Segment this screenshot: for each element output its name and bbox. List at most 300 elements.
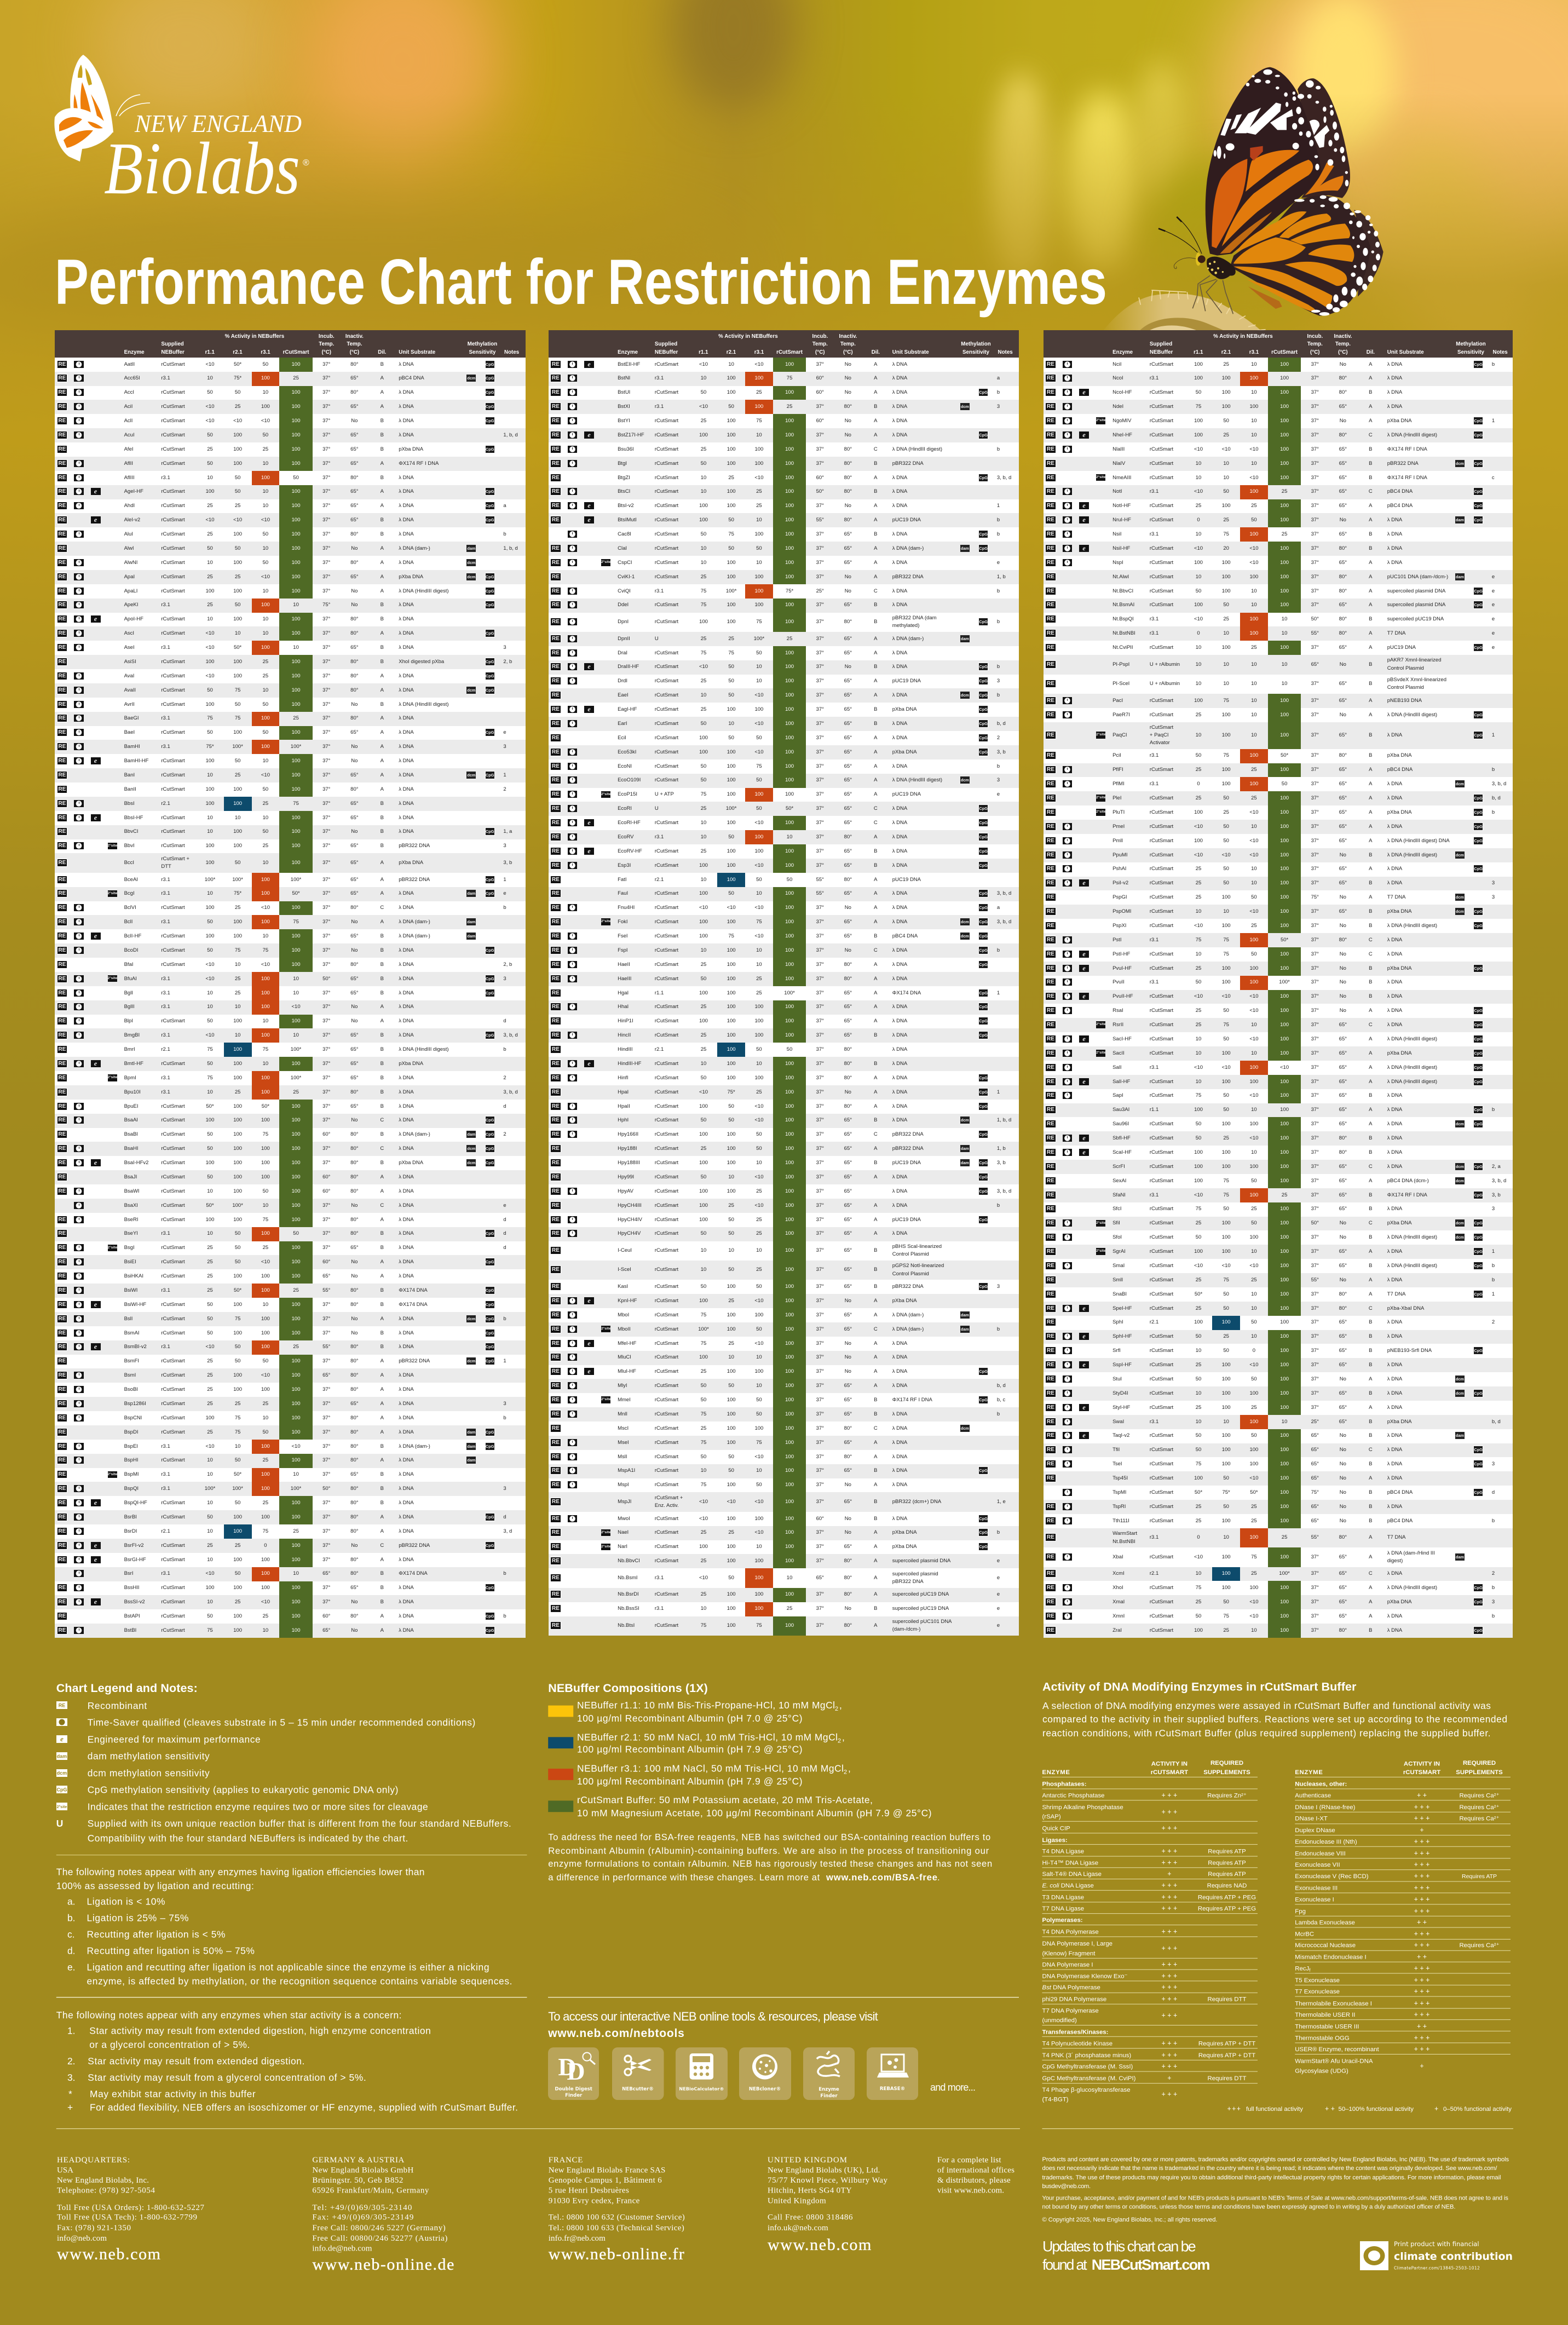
enzyme rows: rCutSmart: [161, 1514, 185, 1520]
enzyme rows: 65°: [844, 1160, 852, 1166]
enzyme rows: 55°: [1311, 1534, 1319, 1540]
enzyme rows: CpG: [1474, 1461, 1483, 1466]
ligation notes: [56, 1867, 512, 1987]
enzyme rows: 100: [785, 1298, 794, 1304]
enzyme rows: No: [1340, 894, 1346, 900]
enzyme rows: 100: [261, 1174, 270, 1180]
enzyme rows: RE: [59, 976, 66, 982]
enzyme rows: rCutSmart: [1150, 1333, 1173, 1339]
enzyme rows: 100: [754, 1516, 763, 1522]
enzyme rows: A: [381, 574, 384, 580]
enzyme rows: 25: [235, 990, 240, 996]
enzyme rows: 80°: [844, 1075, 852, 1081]
enzyme rows: r3.1: [1150, 781, 1158, 787]
enzyme rows: A: [874, 1018, 878, 1024]
enzyme rows: CpG: [486, 674, 494, 678]
enzyme rows: 10: [207, 1188, 213, 1194]
enzyme rows: 10: [756, 560, 762, 566]
enzyme rows: λ DNA: [399, 1528, 414, 1534]
enzyme rows: CpG: [979, 678, 988, 683]
enzyme rows: b: [1492, 1585, 1495, 1591]
enzyme rows: e: [1082, 1078, 1086, 1085]
enzyme rows: rCutSmart: [655, 1326, 678, 1332]
enzyme rows: λ DNA (dam-): [892, 545, 924, 551]
enzyme rows: RE: [1047, 1277, 1054, 1283]
enzyme rows: U: [655, 636, 659, 642]
enzyme rows: B: [1369, 993, 1373, 999]
enzyme rows: 37°: [1311, 404, 1319, 410]
enzyme rows: 100: [233, 616, 242, 622]
enzyme rows: A: [381, 375, 384, 381]
footer: international offices note: & distributors, please: [937, 2176, 1011, 2185]
enzyme rows: 37°: [322, 1230, 330, 1236]
enzyme rows: A: [1369, 630, 1373, 636]
enzyme rows: 100: [233, 1160, 242, 1166]
enzyme rows: A: [381, 588, 384, 594]
enzyme rows: 65°: [1339, 1613, 1347, 1619]
enzyme rows: NmeAIII: [1112, 475, 1131, 481]
enzyme rows: 65°: [350, 446, 359, 452]
star activity notes: May exhibit star activity in this buffer: [90, 2088, 256, 2099]
enzyme rows: MspA1I: [618, 1467, 635, 1474]
enzyme rows: CpG: [1474, 1221, 1483, 1225]
enzyme rows: λ DNA: [892, 1368, 907, 1374]
enzyme rows: 100: [785, 1411, 794, 1417]
enzyme rows: λ DNA: [892, 1482, 907, 1488]
enzyme rows: B: [874, 848, 878, 854]
enzyme rows: 37°: [816, 834, 824, 840]
enzyme rows: MnlI: [618, 1411, 627, 1417]
enzyme rows: 100: [785, 721, 794, 727]
left activity table: + + +: [1161, 2051, 1177, 2059]
enzyme rows: 100: [1280, 838, 1289, 844]
enzyme rows: dam: [467, 1132, 476, 1137]
enzyme rows: No: [351, 758, 358, 764]
right activity table: + + +: [1414, 1895, 1429, 1903]
enzyme rows: BsrDI: [124, 1528, 137, 1534]
enzyme rows: 75: [701, 1482, 706, 1488]
enzyme rows: rCutSmart: [161, 729, 185, 735]
enzyme rows: λ DNA: [399, 962, 414, 968]
footer: United Kingdom address: Call Free: 0800 318486: [768, 2213, 853, 2222]
enzyme rows: rCutSmart: [161, 962, 185, 968]
enzyme rows: A: [874, 503, 878, 509]
enzyme rows: r3.1: [1150, 630, 1158, 636]
enzyme rows: 37°: [1311, 560, 1319, 566]
enzyme rows: 100: [233, 1585, 242, 1591]
enzyme rows: RE: [59, 1245, 66, 1251]
enzyme rows: 100: [785, 1529, 794, 1535]
enzyme rows: rCutSmart: [655, 1247, 678, 1253]
chart updates callout: found at: [1042, 2257, 1087, 2273]
enzyme rows: 37°: [1311, 1554, 1319, 1560]
enzyme rows: 50: [235, 1457, 240, 1463]
enzyme rows: 100: [206, 843, 214, 849]
enzyme rows: 10: [701, 560, 706, 566]
enzyme rows: C: [1369, 488, 1373, 494]
enzyme rows: B: [1369, 852, 1373, 858]
enzyme rows: rCutSmart: [1150, 1362, 1173, 1368]
left activity table: Hi-T4™ DNA Ligase: [1042, 1860, 1098, 1866]
enzyme rows: 80°: [350, 905, 359, 911]
enzyme rows: CpG: [1474, 866, 1483, 871]
enzyme rows: rCutSmart: [161, 545, 185, 551]
enzyme rows: 100: [206, 905, 214, 911]
enzyme rows: 65°: [1339, 1570, 1347, 1576]
buffer r2.1: [548, 1731, 845, 1755]
enzyme rows: e: [94, 1499, 97, 1506]
enzyme rows: 100: [261, 990, 270, 996]
enzyme rows: b: [997, 692, 1000, 698]
enzyme rows: λ DNA: [399, 1316, 414, 1322]
enzyme rows: C: [1369, 951, 1373, 957]
enzyme rows: BspHI: [124, 1457, 138, 1463]
enzyme rows: RE: [1047, 894, 1054, 900]
enzyme rows: 75: [756, 619, 762, 625]
footer: headquarters USA address: Fax: (978) 921-1350: [57, 2224, 131, 2232]
enzyme rows: <10: [754, 905, 763, 911]
enzyme rows: λ DNA (dam-): [399, 919, 430, 925]
enzyme rows: 80°: [1339, 588, 1347, 594]
enzyme rows: PacI: [1112, 698, 1123, 704]
enzyme rows: 3: [997, 678, 1000, 684]
right activity table: + +: [1417, 1953, 1427, 1961]
enzyme rows: pXba DNA: [1387, 908, 1412, 914]
enzyme rows: 2, b: [503, 659, 512, 665]
enzyme rows: λ DNA: [1387, 951, 1402, 957]
enzyme rows: MboI: [618, 1312, 629, 1318]
enzyme rows: 37°: [1311, 1064, 1319, 1071]
enzyme rows: 50: [1223, 1092, 1229, 1098]
enzyme rows: RE: [59, 919, 66, 925]
left activity table: Bst DNA Polymerase: [1042, 1984, 1100, 1991]
enzyme rows: pNEB193 DNA: [1387, 698, 1422, 704]
enzyme rows: 37°: [816, 1267, 824, 1273]
enzyme rows: λ DNA (HindIII digest): [1387, 1064, 1437, 1071]
enzyme rows: 100: [1280, 1022, 1289, 1028]
enzyme rows: <10: [754, 1499, 763, 1505]
enzyme rows: 50: [787, 1046, 792, 1052]
enzyme rows: 100: [1249, 1164, 1258, 1170]
enzyme rows: 10: [787, 834, 792, 840]
enzyme rows: 100: [292, 1330, 300, 1336]
enzyme rows: A: [381, 729, 384, 735]
enzyme rows: pXba DNA: [1387, 1050, 1412, 1056]
enzyme rows: 100: [1280, 1627, 1289, 1633]
enzyme rows: 37°: [816, 503, 824, 509]
enzyme rows: rCutSmart: [1150, 1405, 1173, 1411]
enzyme rows: 80°: [844, 1591, 852, 1597]
enzyme rows: A: [1369, 560, 1373, 566]
enzyme rows: A: [1369, 1248, 1373, 1254]
enzyme rows: 37°: [1311, 1092, 1319, 1098]
enzyme rows: dcm: [1456, 1121, 1464, 1126]
enzyme rows: 75: [1223, 1178, 1229, 1184]
enzyme rows: r3.1: [161, 1287, 170, 1293]
enzyme rows: 100: [292, 1302, 300, 1308]
enzyme rows: 100: [292, 418, 300, 424]
enzyme rows: No: [845, 1516, 851, 1522]
enzyme rows: No: [1340, 1489, 1346, 1495]
enzyme rows: 50*: [234, 1287, 241, 1293]
enzyme rows: 100: [1222, 574, 1231, 580]
enzyme rows: No: [1340, 1447, 1346, 1453]
enzyme rows: CpG: [979, 735, 988, 740]
left activity table: Polymerases:: [1042, 1917, 1083, 1924]
enzyme rows: RE: [552, 706, 560, 712]
enzyme rows: 80°: [350, 475, 359, 481]
enzyme rows: B: [381, 1075, 384, 1081]
enzyme rows: 37°: [816, 531, 824, 537]
enzyme rows: rCutSmart: [655, 1558, 678, 1564]
enzyme rows: 100: [785, 418, 794, 424]
panel: activity of DNA modifying enzymes: [1042, 1681, 1512, 2113]
enzyme rows: e: [94, 615, 97, 623]
enzyme rows: CpG: [486, 976, 494, 981]
enzyme rows: [55, 358, 526, 1638]
enzyme rows: λ DNA (HindIII digest): [399, 701, 449, 707]
footer: France address: www.neb-online.fr: [549, 2245, 684, 2263]
enzyme rows: 25: [701, 418, 706, 424]
enzyme rows: rCutSmart +: [655, 1495, 683, 1501]
enzyme rows: 100: [1249, 752, 1258, 758]
enzyme rows: CpG: [979, 1284, 988, 1289]
enzyme rows: RE: [552, 1160, 560, 1166]
enzyme rows: A: [874, 650, 878, 656]
enzyme rows: r3.1: [1150, 937, 1158, 943]
enzyme rows: rCutSmart: [1150, 1206, 1173, 1212]
column headers: r1.1: [205, 349, 215, 355]
enzyme rows: 100: [785, 1284, 794, 1290]
column headers: (°C): [350, 349, 359, 355]
enzyme rows: CpG: [1474, 733, 1483, 738]
enzyme rows: A: [874, 1103, 878, 1109]
column headers: [1044, 330, 1513, 358]
enzyme rows: No: [845, 1605, 851, 1612]
enzyme rows: 37°: [816, 862, 824, 868]
legend list: 2°site: [57, 1805, 67, 1809]
enzyme rows: e: [1082, 1134, 1086, 1142]
enzyme rows: e: [1082, 1332, 1086, 1340]
enzyme rows: <10: [754, 721, 763, 727]
enzyme rows: CpG: [486, 1118, 494, 1123]
enzyme rows: 50: [728, 1267, 734, 1273]
enzyme rows: (dam-/dcm-): [892, 1626, 920, 1632]
enzyme rows: 10: [701, 375, 706, 381]
enzyme rows: SalI-HF: [1112, 1079, 1130, 1085]
enzyme rows: 75: [1223, 1277, 1229, 1283]
enzyme rows: 100: [1280, 1518, 1289, 1524]
enzyme rows: RE: [59, 1160, 66, 1166]
enzyme rows: dam: [961, 636, 969, 641]
tool tile: Enzyme Finder: [803, 2047, 855, 2100]
enzyme rows: CpG: [486, 659, 494, 664]
enzyme rows: Nt.BsmAI: [1112, 602, 1134, 608]
right activity table: Nucleases, other:: [1295, 1781, 1347, 1787]
enzyme rows: 10: [701, 475, 706, 481]
right activity table: + + +: [1414, 1803, 1429, 1811]
enzyme rows: 37°: [1311, 1036, 1319, 1042]
left activity table: Requires ATP + DTT: [1198, 2040, 1255, 2047]
enzyme rows: rCutSmart: [161, 503, 185, 509]
enzyme rows: 10: [207, 1557, 213, 1563]
enzyme rows: RE: [552, 1146, 560, 1152]
enzyme rows: CpG: [979, 820, 988, 825]
enzyme rows: 100: [1280, 1599, 1289, 1605]
enzyme rows: 3, b, d: [997, 475, 1011, 481]
enzyme rows: EagI-HF: [618, 706, 637, 712]
enzyme rows: 50: [207, 1174, 213, 1180]
enzyme rows: 25: [701, 1368, 706, 1374]
enzyme rows: PmeI: [1112, 824, 1125, 830]
enzyme rows: 37°: [816, 1018, 824, 1024]
enzyme rows: 100: [1222, 389, 1231, 395]
enzyme rows: T7 DNA: [1387, 630, 1406, 636]
enzyme rows: 3, b, d: [1492, 781, 1506, 787]
enzyme rows: 10: [207, 772, 213, 778]
enzyme rows: BamHI-HF: [124, 758, 148, 764]
enzyme rows: λ DNA: [892, 488, 907, 494]
enzyme rows: λ DNA: [1387, 1475, 1402, 1481]
panel: NEB online tools: [547, 2010, 976, 2100]
enzyme rows: ScrFI: [1112, 1164, 1125, 1170]
enzyme rows: B: [874, 1160, 878, 1166]
enzyme rows: [549, 358, 1019, 1636]
enzyme rows: 75: [701, 791, 706, 797]
enzyme rows: 100: [1280, 1092, 1289, 1098]
enzyme rows: 65°: [844, 678, 852, 684]
enzyme rows: RE: [59, 1627, 66, 1633]
enzyme rows: RE: [552, 1467, 560, 1474]
enzyme rows: r3.1: [1150, 616, 1158, 622]
enzyme rows: 10: [701, 1267, 706, 1273]
enzyme rows: rCutSmart: [1150, 1475, 1173, 1481]
enzyme rows: 25: [756, 503, 762, 509]
enzyme rows: λ DNA: [1387, 404, 1402, 410]
enzyme rows: 100: [785, 1146, 794, 1152]
enzyme rows: 65°: [350, 375, 359, 381]
enzyme rows: RE: [552, 919, 560, 925]
enzyme rows: 60°: [322, 1174, 330, 1180]
enzyme rows: 65°: [322, 1372, 330, 1378]
enzyme rows: BsrI: [124, 1570, 133, 1576]
enzyme rows: b: [1492, 1263, 1495, 1269]
enzyme rows: HpyCH4V: [618, 1230, 641, 1236]
enzyme rows: 100: [233, 786, 242, 792]
enzyme rows: 37°: [322, 877, 330, 883]
enzyme rows: 100: [292, 560, 300, 566]
enzyme rows: RE: [552, 820, 560, 826]
enzyme rows: 100: [292, 701, 300, 707]
enzyme rows: 100: [727, 1440, 736, 1446]
right activity table: Thermostable USER III: [1295, 2024, 1359, 2030]
enzyme rows: A: [1369, 809, 1373, 815]
enzyme rows: 37°: [816, 1160, 824, 1166]
enzyme rows: 65°: [1339, 404, 1347, 410]
enzyme rows: 100: [727, 848, 736, 854]
enzyme rows: CpG: [1474, 461, 1483, 466]
enzyme rows: λ DNA: [892, 664, 907, 670]
enzyme rows: Sau3AI: [1112, 1107, 1129, 1113]
enzyme rows: CpG: [486, 1515, 494, 1520]
enzyme rows: b: [997, 389, 1000, 395]
footer: France address: FRANCE: [549, 2156, 583, 2165]
enzyme rows: 37°: [1311, 1022, 1319, 1028]
enzyme rows: 100: [233, 1514, 242, 1520]
enzyme rows: 65°: [350, 503, 359, 509]
enzyme rows: 65°: [844, 1217, 852, 1223]
enzyme rows: 100: [754, 1312, 763, 1318]
enzyme rows: RE: [1047, 1534, 1054, 1540]
enzyme rows: BsmAI: [124, 1330, 140, 1336]
enzyme rows: 75: [701, 1440, 706, 1446]
enzyme rows: 1: [997, 503, 1000, 509]
enzyme rows: 37°: [322, 1146, 330, 1152]
enzyme rows: 37°: [1311, 781, 1319, 787]
right activity table: + + +: [1414, 2045, 1429, 2053]
enzyme rows: RE: [59, 1557, 66, 1563]
enzyme rows: rCutSmart: [1150, 1277, 1173, 1283]
enzyme rows: 2°site: [601, 1397, 611, 1401]
enzyme rows: A: [874, 375, 878, 381]
enzyme rows: 100: [206, 1217, 214, 1223]
enzyme rows: B: [1369, 965, 1373, 971]
enzyme rows: RE: [1047, 1419, 1054, 1425]
enzyme rows: 10: [1251, 1627, 1257, 1633]
enzyme rows: 10: [235, 1032, 240, 1038]
enzyme rows: 3: [1492, 880, 1495, 886]
enzyme rows: 80°: [350, 1146, 359, 1152]
column headers: Inactiv.: [345, 333, 364, 339]
enzyme rows: 75: [756, 1622, 762, 1628]
enzyme rows: RE: [552, 1425, 560, 1431]
enzyme rows: B: [874, 706, 878, 712]
enzyme rows: No: [1340, 517, 1346, 523]
enzyme rows: NaeI: [618, 1529, 629, 1535]
enzyme rows: 100: [1222, 375, 1231, 381]
panel: NEB online tools: and more...: [930, 2082, 976, 2093]
buffer r1.1: ,: [839, 1700, 842, 1711]
enzyme rows: 100: [727, 947, 736, 953]
enzyme rows: 37°: [816, 706, 824, 712]
enzyme rows: + PaqCI: [1150, 732, 1168, 738]
enzyme rows: rCutSmart: [161, 815, 185, 821]
enzyme rows: 65°: [844, 820, 852, 826]
enzyme rows: pBR322 DNA: [892, 1146, 924, 1152]
enzyme rows: 50*: [1281, 752, 1288, 758]
enzyme rows: ΦX174 RF I DNA: [892, 1397, 932, 1403]
enzyme rows: 80°: [350, 361, 359, 367]
enzyme rows: SfoI: [1112, 1234, 1122, 1240]
enzyme rows: RE: [59, 1471, 66, 1477]
enzyme rows: e: [1082, 516, 1086, 523]
enzyme rows: C: [1369, 1220, 1373, 1226]
column headers: r1.1: [1194, 349, 1203, 355]
enzyme rows: 10: [756, 962, 762, 968]
enzyme rows: 65°: [844, 1188, 852, 1194]
enzyme rows: 3: [503, 1486, 506, 1492]
enzyme rows: 100: [1280, 1432, 1289, 1438]
enzyme rows: rCutSmart: [1150, 574, 1173, 580]
enzyme rows: supercoiled pUC19 DNA: [892, 1591, 949, 1597]
panel: chart legend and notes: [56, 1682, 527, 2113]
enzyme rows: CpG: [1474, 1447, 1483, 1452]
enzyme rows: 100: [727, 1061, 736, 1067]
enzyme rows: 50: [1196, 389, 1201, 395]
enzyme rows: 75: [235, 1316, 240, 1322]
enzyme rows: RE: [59, 729, 66, 735]
enzyme rows: pXba-XbaI DNA: [1387, 1305, 1424, 1311]
